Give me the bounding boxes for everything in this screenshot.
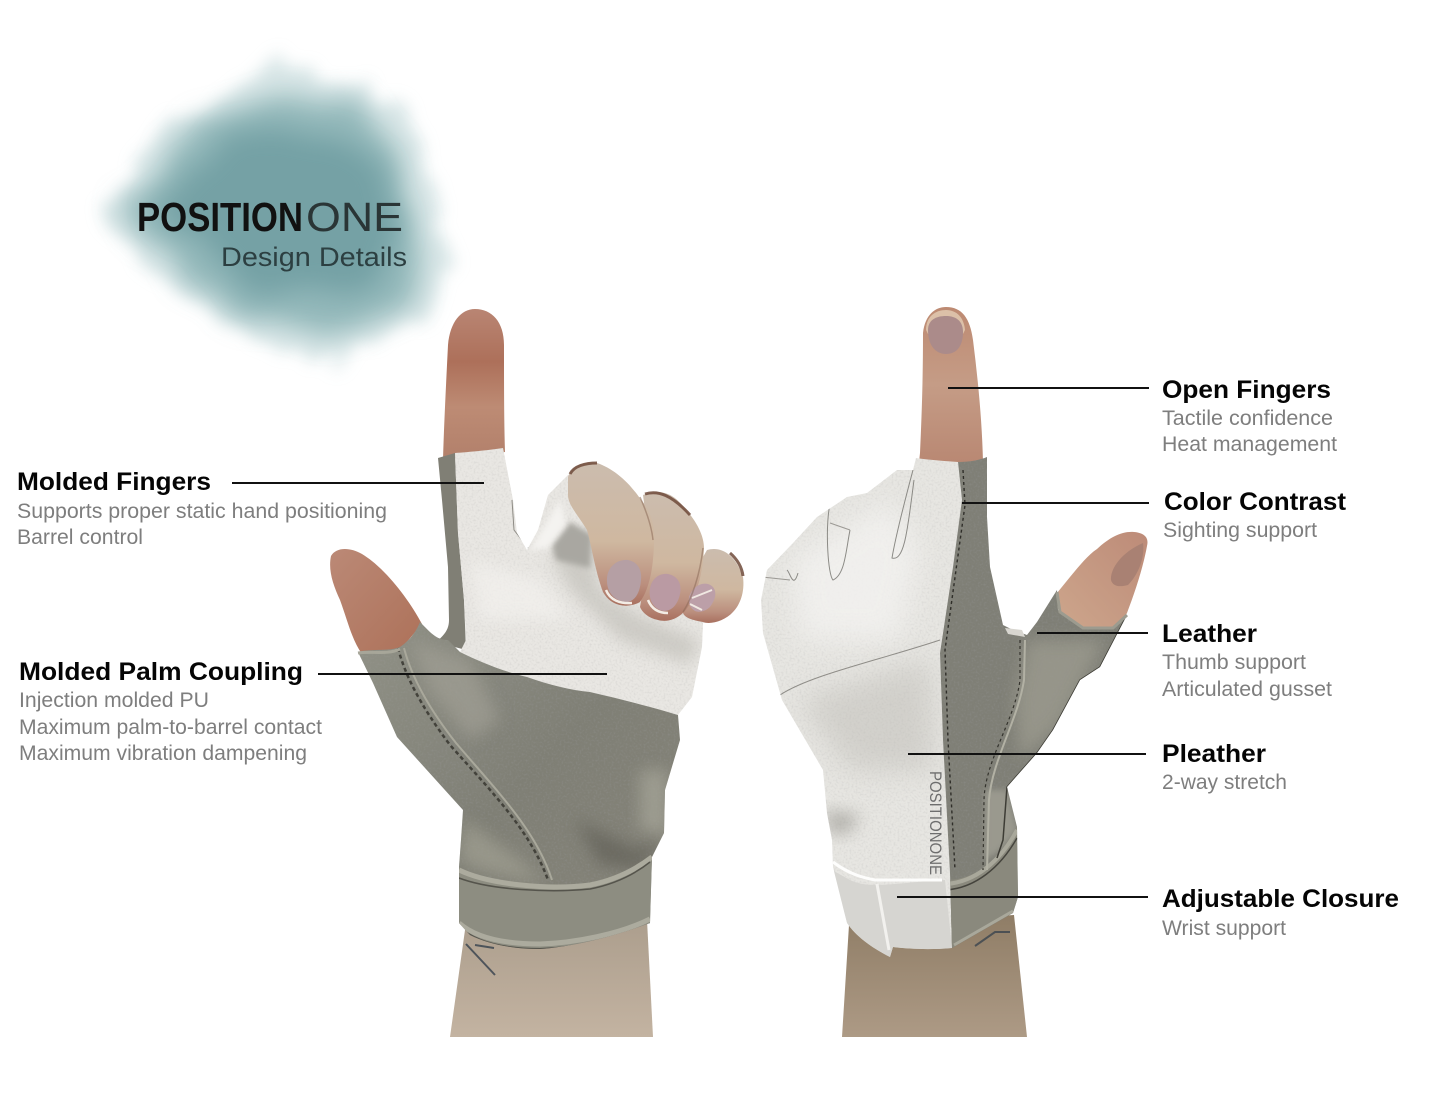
callout: Open Fingers: Open Fingers (1162, 376, 1331, 404)
callout: Leather: Leather (1162, 620, 1257, 648)
grey leather panel (940, 457, 1127, 948)
fingernails (607, 560, 641, 602)
forearm (450, 920, 653, 1037)
tattoo marks (975, 932, 1010, 946)
subtitle: Design Details (221, 242, 407, 272)
white panel shading (470, 500, 700, 665)
left hand: palm view of glove (330, 309, 743, 1037)
callout: Molded Fingers: Barrel control (17, 525, 143, 549)
logo wordmark: POSITION (137, 194, 303, 240)
grey strip along index finger (436, 453, 466, 650)
watercolor blob (92, 66, 443, 357)
forearm (842, 915, 1027, 1037)
callout: Pleather (908, 740, 1287, 794)
adjacent light patch near thumb crotch (1005, 628, 1025, 637)
callout: Color Contrast: Sighting support (1163, 518, 1317, 542)
index finger (919, 307, 983, 462)
callout: Adjustable Closure: Adjustable Closure (1162, 885, 1399, 913)
white leather panel (761, 458, 962, 957)
callout: Molded Palm Coupling: Maximum palm-to-barrel contact (19, 715, 322, 739)
right hand: back view of glove (761, 307, 1147, 1037)
finger crease shadows (640, 497, 703, 612)
thumb (1057, 532, 1147, 630)
callout: Molded Palm Coupling: Injection molded PU (19, 688, 209, 712)
callout: Leather: Thumb support (1162, 650, 1306, 674)
callout: Molded Palm Coupling: Molded Palm Coupling (19, 658, 303, 686)
callout: Molded Fingers: Supports proper static hand positioning (17, 499, 387, 523)
thumbnail (1111, 543, 1143, 586)
curled fingers (568, 463, 743, 623)
callout: Pleather: 2-way stretch (1162, 770, 1287, 794)
index finger (443, 309, 505, 460)
callout: Adjustable Closure (897, 885, 1399, 940)
callout: Color Contrast (962, 488, 1347, 542)
grey palm leather (358, 622, 680, 949)
callout: Molded Fingers (17, 468, 484, 549)
title: Position One Design Details (137, 194, 407, 272)
callout: Open Fingers: Heat management (1162, 432, 1337, 456)
thumb cuff trim (358, 649, 400, 653)
callout: Molded Palm Coupling: Maximum vibration dampening (19, 741, 307, 765)
callout: Open Fingers (948, 376, 1337, 456)
thumb cuff trim (1057, 592, 1127, 628)
grey panel shading and seams (945, 470, 1127, 948)
callout: Molded Fingers: Molded Fingers (17, 468, 211, 496)
logo wordmark: ONE (306, 194, 403, 240)
callout: Open Fingers: Tactile confidence (1162, 406, 1333, 430)
tattoo marks (466, 944, 495, 975)
glove logo: POSITIONONE (926, 771, 945, 875)
callout: Leather (1037, 620, 1332, 701)
index fingernail (926, 310, 965, 354)
white leather back panel (455, 448, 720, 715)
callout: Color Contrast: Color Contrast (1164, 488, 1347, 516)
white panel shading and seams (762, 470, 952, 957)
thumb (330, 549, 422, 654)
palm shading and seams (398, 640, 668, 949)
callout: Pleather: Pleather (1162, 740, 1266, 768)
callout: Molded Palm Coupling (19, 658, 607, 765)
callout: Leather: Articulated gusset (1162, 677, 1332, 701)
callout: Adjustable Closure: Wrist support (1162, 916, 1286, 940)
